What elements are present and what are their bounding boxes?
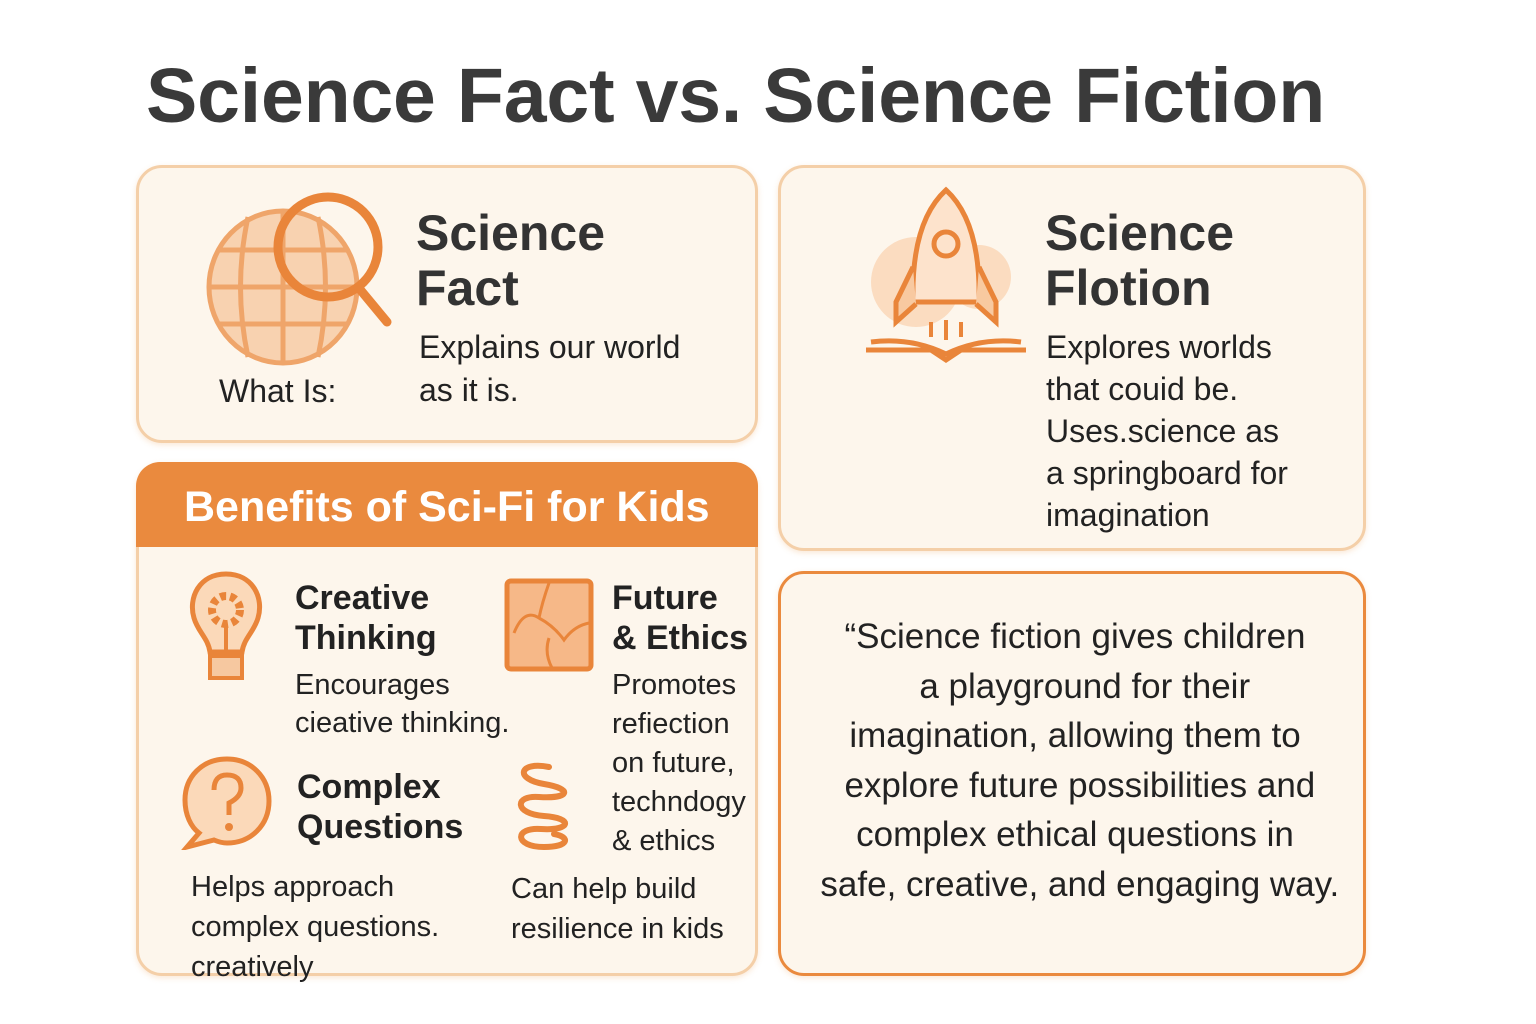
quote text: complex ethical questions in	[856, 815, 1294, 854]
label: what is: What Is:	[219, 373, 336, 409]
icon: globe with magnifier	[206, 192, 392, 366]
icon: puzzle	[504, 578, 594, 672]
quote text: “Science fiction gives children	[844, 617, 1306, 656]
item: future & ethics: refiection	[612, 708, 730, 740]
item: future & ethics: Promotes	[612, 669, 736, 701]
description: Explores worlds	[1046, 329, 1272, 365]
heading: Science	[416, 205, 605, 261]
item: future & ethics: & ethics	[612, 825, 715, 857]
item: complex questions: Questions	[297, 808, 463, 846]
item: future & ethics: on future,	[612, 747, 735, 779]
panel: science fiction	[778, 165, 1366, 551]
item: resilience	[511, 762, 724, 945]
item: future & ethics: techndogy	[612, 786, 746, 818]
quote text	[820, 617, 1339, 904]
item: future & ethics: Future	[612, 579, 718, 617]
heading: Flotion	[1045, 260, 1212, 316]
description: as it is.	[419, 372, 519, 408]
description	[419, 329, 680, 408]
item: future & ethics: & Ethics	[612, 619, 748, 657]
quote text: explore future possibilities and	[844, 766, 1315, 804]
heading: Science	[1045, 205, 1234, 261]
item: creative thinking	[190, 572, 509, 739]
item: complex questions	[181, 756, 463, 983]
item: resilience: Can help build	[511, 873, 696, 905]
item: creative thinking: cieative thinking.	[295, 707, 509, 739]
item: resilience: resilience in kids	[511, 913, 724, 945]
description: Explains our world	[419, 329, 680, 365]
item: creative thinking: Creative	[295, 579, 429, 617]
heading	[1045, 205, 1234, 316]
heading	[416, 205, 605, 316]
item: creative thinking: Thinking	[295, 619, 437, 657]
item: complex questions: complex questions.	[191, 911, 439, 943]
icon: question bubble	[181, 756, 272, 850]
icon: spring	[518, 762, 568, 850]
item: complex questions: creatively	[191, 951, 314, 983]
quote text: imagination, allowing them to	[849, 716, 1301, 755]
item: complex questions: Complex	[297, 768, 441, 806]
icon: lightbulb	[190, 572, 262, 680]
panel: quote	[778, 571, 1366, 976]
description: a springboard for	[1046, 455, 1288, 491]
heading: Fact	[416, 260, 519, 316]
title: Science Fact vs. Science Fiction	[146, 53, 1325, 139]
quote text: a playground for their	[919, 666, 1250, 706]
description: that couid be.	[1046, 371, 1238, 407]
panel: science fact	[136, 165, 758, 443]
description	[1046, 329, 1288, 533]
panel: benefits	[136, 462, 758, 976]
description: imagination	[1046, 497, 1210, 533]
item: future & ethics	[504, 578, 748, 857]
header bar: Benefits of Sci-Fi for Kids	[184, 483, 710, 531]
item: complex questions: Helps approach	[191, 871, 394, 903]
description: Uses.science as	[1046, 413, 1279, 449]
header bar	[136, 462, 758, 547]
icon: rocket on book	[866, 186, 1026, 363]
item: creative thinking: Encourages	[295, 669, 450, 701]
quote text: safe, creative, and engaging way.	[820, 864, 1339, 904]
